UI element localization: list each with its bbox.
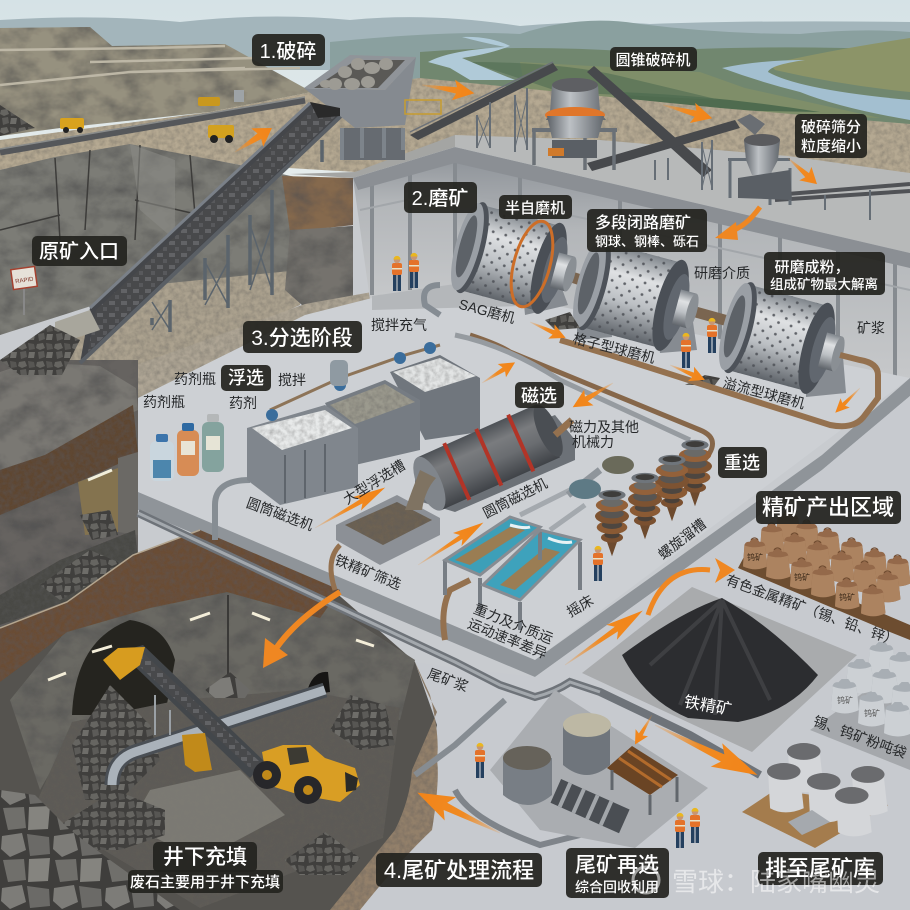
- panel: non-ferrous concentrate bags: 钨矿: [794, 572, 810, 582]
- text: 搅拌: 搅拌: [278, 372, 306, 388]
- label: 研磨成粉: 组成矿物最大解离: [770, 276, 878, 292]
- label: 井下充填: [153, 842, 257, 872]
- panel: iron concentrate pile: [582, 587, 857, 752]
- text: 重力及介质运动速率差异: 运动速率差异: [465, 615, 549, 662]
- text: 药剂: 药剂: [229, 395, 257, 411]
- panel: left rock wall and soil: [0, 360, 138, 680]
- icon: cone crusher: [532, 78, 617, 170]
- trestle supports: [152, 140, 322, 332]
- text: 搅拌充气: 搅拌充气: [371, 317, 427, 333]
- panel: iron concentrate bin: [336, 470, 440, 565]
- label: 尾矿再选: 尾矿再选: [575, 854, 659, 877]
- label: 破碎筛分 粒度缩小: 粒度缩小: [801, 138, 861, 155]
- text: 有色金属精矿: 有色金属精矿（锡、铅、锌）: [724, 571, 900, 649]
- label: 多段闭路磨矿: 多段闭路磨矿: [595, 213, 691, 232]
- panel: shaking tables: [445, 490, 585, 630]
- panel: tan ground plateau: [0, 78, 910, 176]
- label: 多段闭路磨矿: 钢球、钢棒、砾石: [595, 234, 699, 249]
- text: 格子型球磨机: 格子型球磨机: [571, 330, 657, 366]
- label: 1.破碎: 1.破碎: [260, 40, 316, 63]
- panel: flotation tanks: [247, 342, 480, 505]
- river left: [428, 37, 515, 80]
- mill 1 SAG: [444, 198, 587, 321]
- text: 尾矿浆: 尾矿浆: [426, 665, 470, 695]
- label: 半自磨机: 半自磨机: [505, 200, 565, 217]
- panel: sky and distant landscape: [0, 0, 910, 180]
- text: 圆筒磁选机 left: 圆筒磁选机: [244, 495, 316, 533]
- soil and rock block: [282, 176, 353, 232]
- label: 磁选: 磁选: [521, 386, 557, 406]
- icon: underground pipe: [112, 690, 325, 785]
- label: 3.分选阶段: [243, 321, 362, 353]
- river right: [722, 60, 910, 120]
- panel: tailings reprocessing plant: [490, 690, 708, 848]
- panel: factory wall: [353, 150, 910, 380]
- label: 原矿入口: 原矿入口: [39, 240, 119, 263]
- panel: non-ferrous concentrate bags: [738, 511, 910, 640]
- icon: reagent bottles: [150, 414, 224, 481]
- panel: quarry cliff: [0, 144, 353, 385]
- text: 锡、钨矿粉吨袋: 锡、钨矿粉吨袋: [811, 713, 909, 761]
- label: 磁选: [515, 382, 564, 408]
- label: 重选: [718, 447, 767, 478]
- label: 4.尾矿处理流程: [376, 853, 542, 887]
- panel: white ton bags: 钨矿: [864, 708, 880, 718]
- lamps: [48, 613, 374, 680]
- label: 3.分选阶段: 3.分选阶段: [251, 327, 353, 350]
- arrows: process flow: [229, 75, 865, 845]
- text: 圆筒磁选机 right: 圆筒磁选机: [480, 475, 550, 521]
- label: 半自磨机: [499, 195, 572, 219]
- label: 原矿入口: [32, 236, 127, 266]
- label: 多段闭路磨矿: [587, 209, 707, 252]
- label: 排至尾矿库: [758, 852, 883, 885]
- panel: soil cut edge: [330, 662, 438, 910]
- label: 精矿产出区域: [756, 491, 901, 524]
- text: 研磨介质: 研磨介质: [694, 265, 750, 281]
- panel: ball mills: [424, 198, 855, 401]
- rock piles underground: [0, 672, 395, 910]
- label: 井下充填: 井下充填: [163, 846, 247, 869]
- label: 浮选: [221, 365, 271, 391]
- pipe behind: [424, 285, 440, 315]
- tunnel small: [306, 672, 330, 695]
- quarry floor: [60, 270, 300, 385]
- text: 摇床: 摇床: [564, 592, 596, 620]
- text: 磁力及其他 机械力: [569, 419, 639, 450]
- ore spill: [545, 312, 580, 330]
- text: SAG磨机: SAG磨机: [457, 296, 517, 326]
- icon: mining trucks: [60, 90, 244, 143]
- mill 2 grate: [566, 235, 709, 358]
- label: 4.尾矿处理流程: 4.尾矿处理流程: [384, 858, 534, 883]
- tank 3: [390, 355, 480, 440]
- tank 2: [325, 380, 420, 465]
- label: 尾矿再选: 综合回收利用: [575, 879, 659, 895]
- label: 精矿产出区域: 精矿产出区域: [762, 495, 894, 520]
- spiral classifier: [551, 779, 630, 833]
- label: 研磨成粉: [764, 252, 885, 295]
- panel: lower road strip: [100, 292, 372, 400]
- panel: non-ferrous concentrate bags: 钨矿: [839, 592, 855, 602]
- label: 研磨成粉: 研磨成粉，: [774, 259, 850, 276]
- panel: magnetic drum separator: [406, 398, 575, 517]
- label: 圆锥破碎机: 圆锥破碎机: [615, 52, 691, 69]
- mill 3 overflow: [712, 278, 855, 401]
- panel: tailings bags on pallet: [742, 743, 888, 848]
- label: 2.磨矿: 2.磨矿: [412, 187, 468, 210]
- label: 重选: 重选: [724, 453, 760, 473]
- label: 废石主要用于井下充填: 废石主要用于井下充填: [130, 874, 280, 891]
- panel: grinding and separation floor: [138, 284, 910, 677]
- tunnel big: [72, 620, 175, 715]
- shafts: [565, 275, 728, 321]
- agitators: [270, 345, 440, 410]
- text: 铁精矿 on pile: 铁精矿: [683, 693, 733, 719]
- panel: white ton bags: 钨矿: [837, 695, 853, 705]
- label: 1.破碎: [252, 34, 325, 66]
- panel: main conveyor: [80, 103, 342, 363]
- label: 2.磨矿: [404, 182, 477, 213]
- washing table: [607, 746, 678, 795]
- text: 大型浮选槽: 大型浮选槽: [340, 457, 408, 507]
- panel: underground cavity: [0, 590, 437, 910]
- icon: primary crusher hopper: [304, 55, 441, 160]
- icon: underground conveyor: [103, 645, 265, 778]
- icon: conveyors on deck: [410, 62, 910, 220]
- panel: tailings terraces: [0, 27, 312, 136]
- icon: warning sign: [11, 266, 37, 315]
- text: 磁力及其他 机械力: 磁力及其他: [569, 419, 639, 435]
- panel: brown soil band: [0, 530, 340, 682]
- panel: upper deck: [290, 135, 910, 268]
- panel: non-ferrous concentrate bags: 钨矿: [747, 552, 763, 562]
- text: 重力及介质运动速率差异: 重力及介质运: [471, 601, 555, 647]
- text: 药剂瓶 lower: 药剂瓶: [143, 394, 185, 410]
- tank 1: [247, 405, 358, 505]
- label: 排至尾矿库: 排至尾矿库: [765, 856, 875, 881]
- text: 矿浆: 矿浆: [857, 320, 885, 336]
- label: 尾矿再选: [566, 848, 669, 898]
- text: 铁精矿筛选: 铁精矿筛选: [333, 551, 403, 593]
- text: 溢流型球磨机: 溢流型球磨机: [721, 374, 807, 412]
- cavity floor: [34, 690, 400, 908]
- icon: yellow loader: [253, 745, 360, 804]
- text: 磁力及其他 机械力: 机械力: [572, 434, 614, 450]
- thickener tanks: [503, 713, 611, 805]
- icon: copper and steel pipes: [138, 335, 878, 845]
- watermark: 雪球：陆家嘴幽灵: [672, 867, 880, 897]
- icon: warning sign: RAPID: [15, 277, 35, 285]
- panel: white ton bags: [810, 642, 910, 770]
- icon: raw ore pile: [0, 310, 100, 375]
- icon: workers: [392, 253, 717, 848]
- text: 药剂瓶 upper: 药剂瓶: [174, 371, 216, 387]
- label: 破碎筛分 粒度缩小: 破碎筛分: [801, 118, 861, 136]
- panel: tailings lower floor: [330, 396, 910, 910]
- text: 螺旋溜槽: 螺旋溜槽: [655, 515, 709, 563]
- panel: spiral chutes: [568, 440, 712, 556]
- label: 圆锥破碎机: [610, 47, 697, 71]
- label: 破碎筛分 粒度缩小: [795, 114, 867, 158]
- icon: secondary crusher: [728, 114, 792, 205]
- label: 浮选: 浮选: [228, 368, 264, 388]
